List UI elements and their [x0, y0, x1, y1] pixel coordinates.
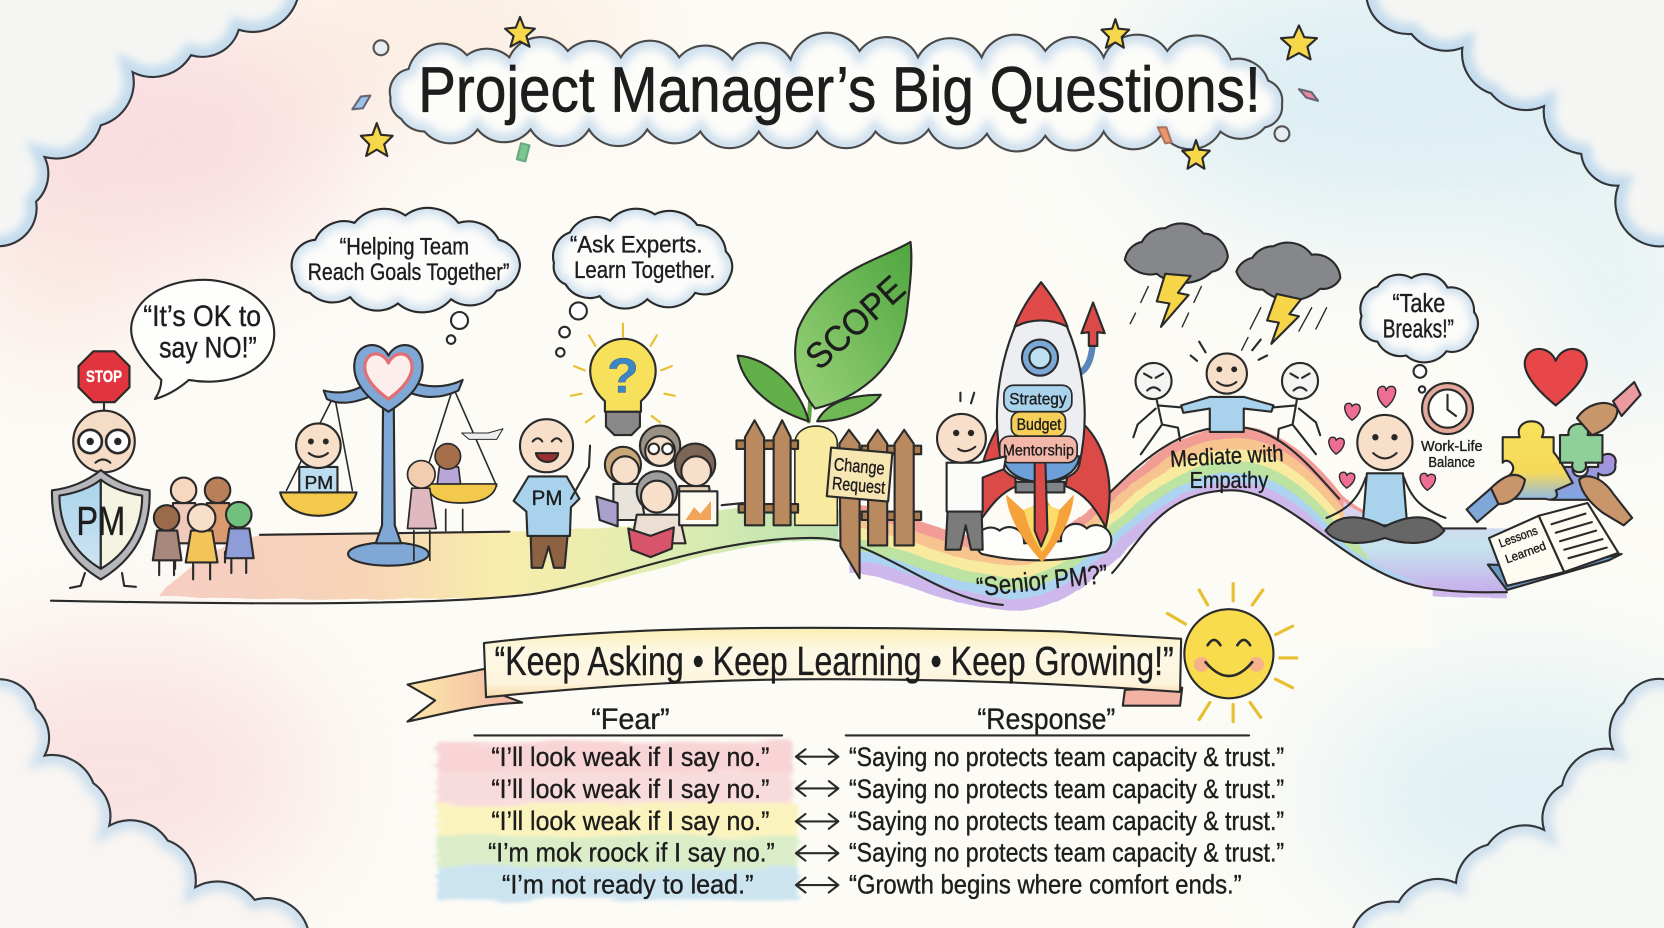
change request sign: Change	[833, 454, 885, 479]
PM head with glasses	[73, 411, 135, 472]
big scope leaf	[738, 242, 913, 421]
rainbow path	[51, 427, 1507, 647]
mediation figures	[1133, 340, 1320, 454]
thought cloud: take breaks: “Take	[1392, 290, 1445, 318]
icon: smiling sun	[1167, 584, 1297, 722]
row 3: “I’ll look weak if I say no.”	[491, 806, 769, 836]
flame	[1006, 493, 1074, 562]
row 2	[491, 774, 1284, 804]
left pan PM figure	[280, 423, 357, 516]
bridge label: Empathy	[1190, 467, 1268, 493]
ribbon banner: “Keep Asking • Keep Learning • Keep Growing!”	[495, 638, 1174, 684]
hearts	[1329, 386, 1436, 490]
bridge label	[1169, 440, 1284, 493]
pale end of band	[1344, 501, 1507, 592]
balance scale	[280, 345, 503, 566]
thought cloud: helping team: Reach Goals Together”	[308, 259, 509, 286]
person beside rocket	[937, 393, 1006, 550]
ground left segment	[159, 505, 838, 599]
row 4: “I’m mok roock if I say no.”	[488, 838, 775, 868]
thought cloud: helping team: “Helping Team	[340, 234, 469, 261]
body	[997, 282, 1085, 482]
stacked labels: Strategy	[1009, 389, 1067, 408]
thought cloud: ask experts	[553, 209, 732, 357]
thought cloud: take breaks: Breaks!”	[1383, 315, 1454, 343]
left pan PM figure: PM	[305, 473, 333, 493]
row 1	[491, 742, 1284, 772]
row 5	[502, 870, 1242, 900]
storm clouds	[1125, 223, 1340, 350]
change request sign: Request	[831, 473, 886, 498]
lessons learned book: Learned	[1503, 539, 1548, 566]
icon: stop sign: STOP	[86, 367, 122, 386]
title text: Project Manager’s Big Questions!	[418, 54, 1261, 125]
puzzle pieces	[1552, 454, 1616, 500]
expert group	[596, 426, 717, 557]
icon: question light bulb	[571, 324, 675, 435]
heart	[1525, 349, 1587, 405]
row 4	[488, 838, 1284, 868]
fear and response table	[437, 703, 1284, 900]
archway	[795, 426, 837, 525]
icon: stop sign	[79, 351, 129, 416]
icon: wall clock and work-life balance	[1421, 383, 1483, 471]
corner cloud: top left	[0, 0, 308, 255]
icon: wall clock and work-life balance: Balance	[1428, 455, 1475, 471]
left pickets	[736, 420, 798, 525]
lessons learned book: Lessons	[1497, 523, 1539, 550]
row 2: “I’ll look weak if I say no.”	[491, 774, 769, 804]
speech bubble: it's ok to say no: “It’s OK to	[143, 300, 261, 333]
fins	[978, 419, 1017, 520]
bridge label: Mediate with	[1169, 440, 1284, 472]
row 3	[491, 806, 1284, 836]
row 1: “I’ll look weak if I say no.”	[491, 742, 769, 772]
row 3: “Saying no protects team capacity & trust.”	[849, 806, 1284, 836]
right pickets	[839, 430, 921, 578]
table headers: “Fear”	[591, 703, 670, 736]
speech bubble: it's ok to say no	[131, 280, 274, 399]
shield	[52, 470, 150, 579]
thought cloud: take breaks	[1360, 274, 1478, 393]
row 1: “Saying no protects team capacity & trust.”	[849, 742, 1284, 772]
hands	[1613, 382, 1641, 416]
thought cloud: helping team	[292, 208, 520, 344]
corner cloud: bottom right	[1342, 671, 1664, 928]
row 4: “Saying no protects team capacity & trust.”	[849, 838, 1284, 868]
shield: PM	[76, 498, 125, 544]
ribbon banner	[408, 628, 1182, 722]
rainbow crayon strips	[437, 742, 798, 900]
row 5: “I’m not ready to lead.”	[502, 870, 753, 900]
heart	[354, 345, 423, 412]
laughing PM figure: PM	[532, 487, 562, 510]
meditating figure	[1325, 386, 1445, 543]
thought cloud: ask experts: “Ask Experts.	[570, 232, 703, 259]
figure: PM with stop sign and shield	[52, 351, 150, 588]
rainbow band	[849, 432, 1507, 605]
right pan figures	[408, 429, 503, 560]
team of children	[153, 478, 254, 579]
row 5: “Growth begins where comfort ends.”	[849, 870, 1242, 900]
corner cloud: top right	[1356, 0, 1664, 255]
icon: question light bulb: ?	[607, 350, 639, 404]
corner cloud: bottom left	[0, 671, 318, 928]
thought cloud: ask experts: Learn Together.	[574, 257, 715, 284]
path outlines	[51, 427, 1507, 605]
title cloud	[390, 33, 1282, 151]
stacked labels: Mentorship	[1003, 442, 1074, 459]
laughing PM figure	[514, 419, 590, 568]
book: purple	[596, 497, 618, 526]
table headers	[474, 703, 1249, 736]
table headers: “Response”	[977, 703, 1115, 736]
smoke	[976, 524, 1111, 560]
fence gate and scope plant	[736, 242, 921, 578]
stacked labels	[1000, 385, 1077, 463]
rocket with person	[937, 282, 1111, 602]
heart and puzzle hands	[1467, 349, 1641, 525]
arrow	[1078, 333, 1093, 374]
icon: wall clock and work-life balance: Work-Life	[1421, 439, 1483, 455]
row 2: “Saying no protects team capacity & trust.”	[849, 774, 1284, 804]
change request sign	[827, 448, 892, 502]
chart frame	[679, 491, 717, 525]
big scope leaf: SCOPE	[797, 267, 913, 377]
title decorations: stars and confetti	[352, 17, 1318, 169]
stacked labels: Budget	[1017, 415, 1061, 434]
trim below bridge	[1112, 490, 1433, 647]
speech bubble: it's ok to say no: say NO!”	[159, 332, 257, 365]
book: red	[628, 527, 674, 557]
senior pm label: “Senior PM?”	[975, 559, 1109, 602]
lessons learned book	[1488, 503, 1622, 590]
